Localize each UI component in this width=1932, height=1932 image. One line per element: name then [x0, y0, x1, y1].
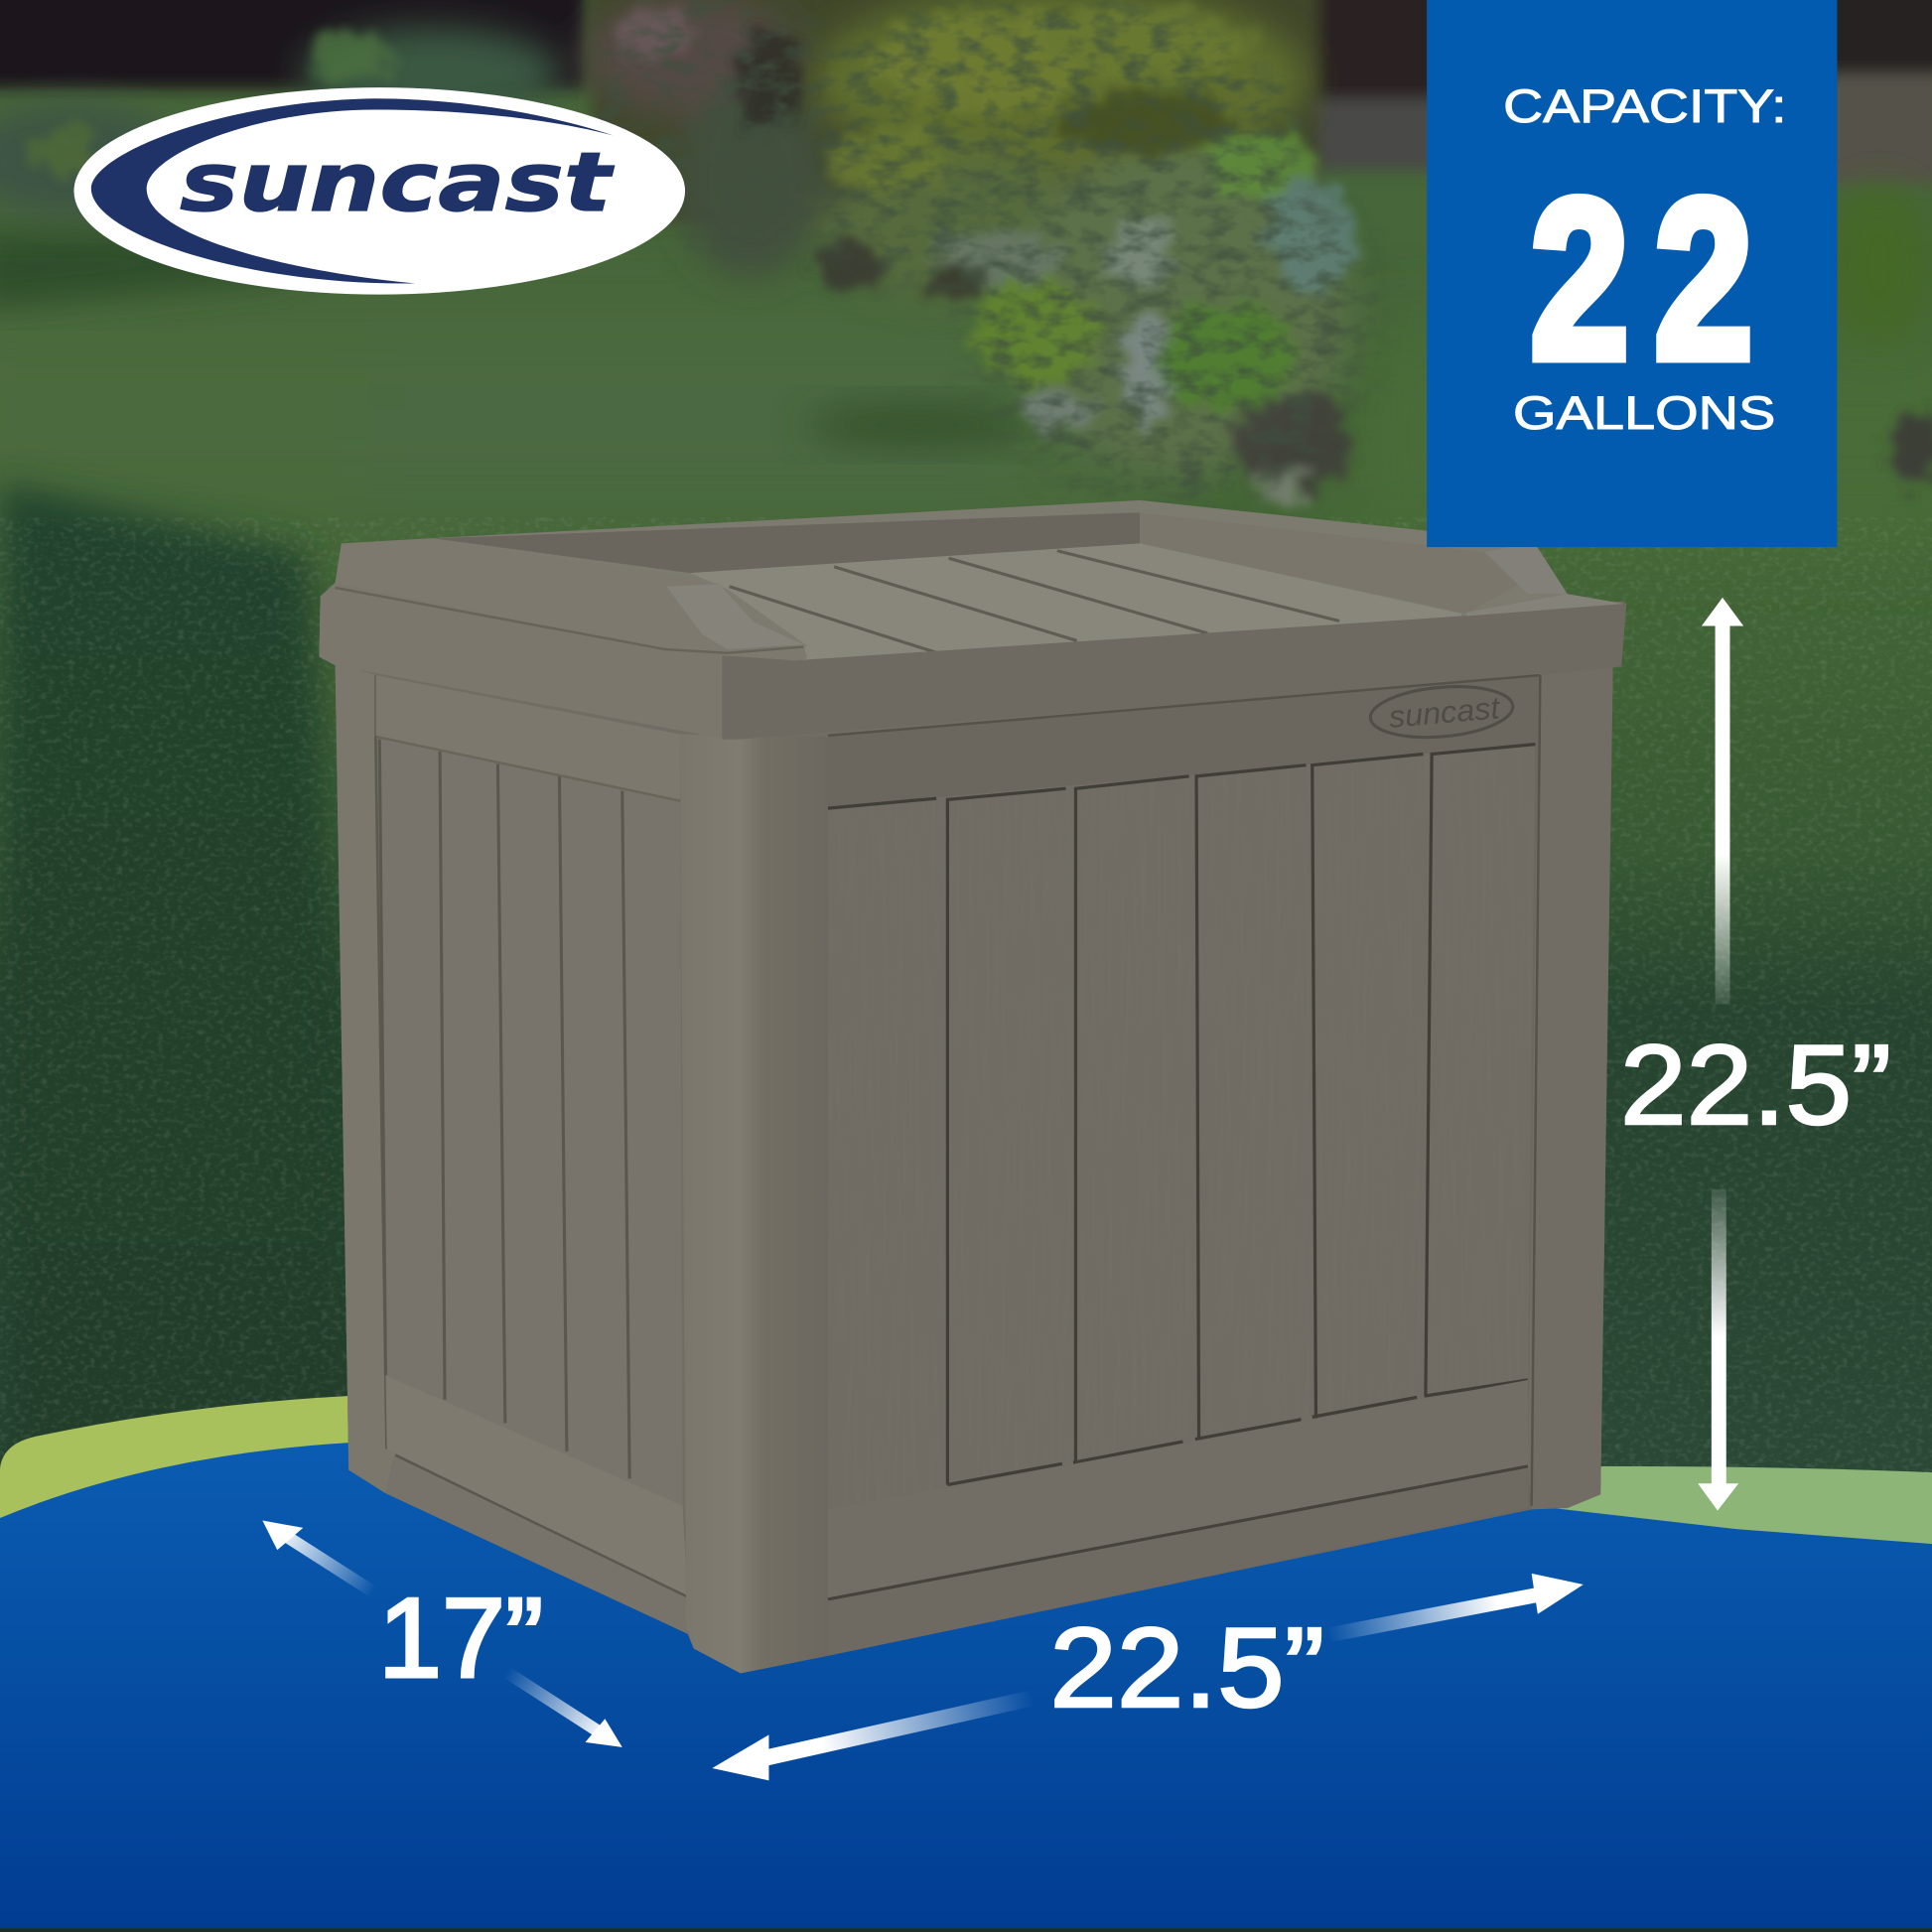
arrow: height top	[1702, 598, 1743, 1004]
foliage detail	[25, 4, 1932, 504]
arrow: depth upper	[262, 1520, 373, 1591]
dark fence and trunks	[0, 0, 1932, 221]
capacity number: 2	[1531, 154, 1629, 406]
upper lawn	[0, 302, 1932, 542]
capacity unit: GALLONS	[1513, 386, 1775, 439]
arrow: width right	[1328, 1574, 1584, 1635]
lid: front band	[722, 602, 1626, 740]
emblem: suncast	[1387, 690, 1502, 735]
product: deck box	[319, 500, 1626, 1673]
lid: left rim	[319, 538, 807, 740]
right post	[1528, 671, 1613, 1509]
ground: green arcs	[0, 1396, 1932, 1565]
logo wordmark: suncast	[180, 136, 615, 230]
front panel	[826, 675, 1542, 1656]
logo swoosh	[91, 98, 614, 284]
arrow: height bottom	[1698, 1189, 1738, 1511]
emblem	[1368, 681, 1515, 743]
dimension: depth: 17”	[378, 1576, 543, 1702]
dimension: height: 22.5”	[1620, 1023, 1891, 1149]
arrow: width left	[712, 1698, 1033, 1780]
ground: blue floor	[0, 1442, 1932, 1928]
capacity label: CAPACITY:	[1503, 79, 1787, 132]
dimension: width: 22.5”	[1049, 1605, 1324, 1731]
lid: tray floor and walls	[428, 500, 1624, 690]
left side panel	[336, 663, 688, 1634]
box base silhouette	[336, 663, 1613, 1673]
foliage base	[0, 0, 1931, 475]
logo: suncast	[73, 87, 685, 295]
panel: capacity	[1427, 0, 1837, 547]
arrow: depth lower	[506, 1672, 622, 1747]
capacity number: 2	[1654, 154, 1752, 406]
corner post	[680, 735, 827, 1673]
